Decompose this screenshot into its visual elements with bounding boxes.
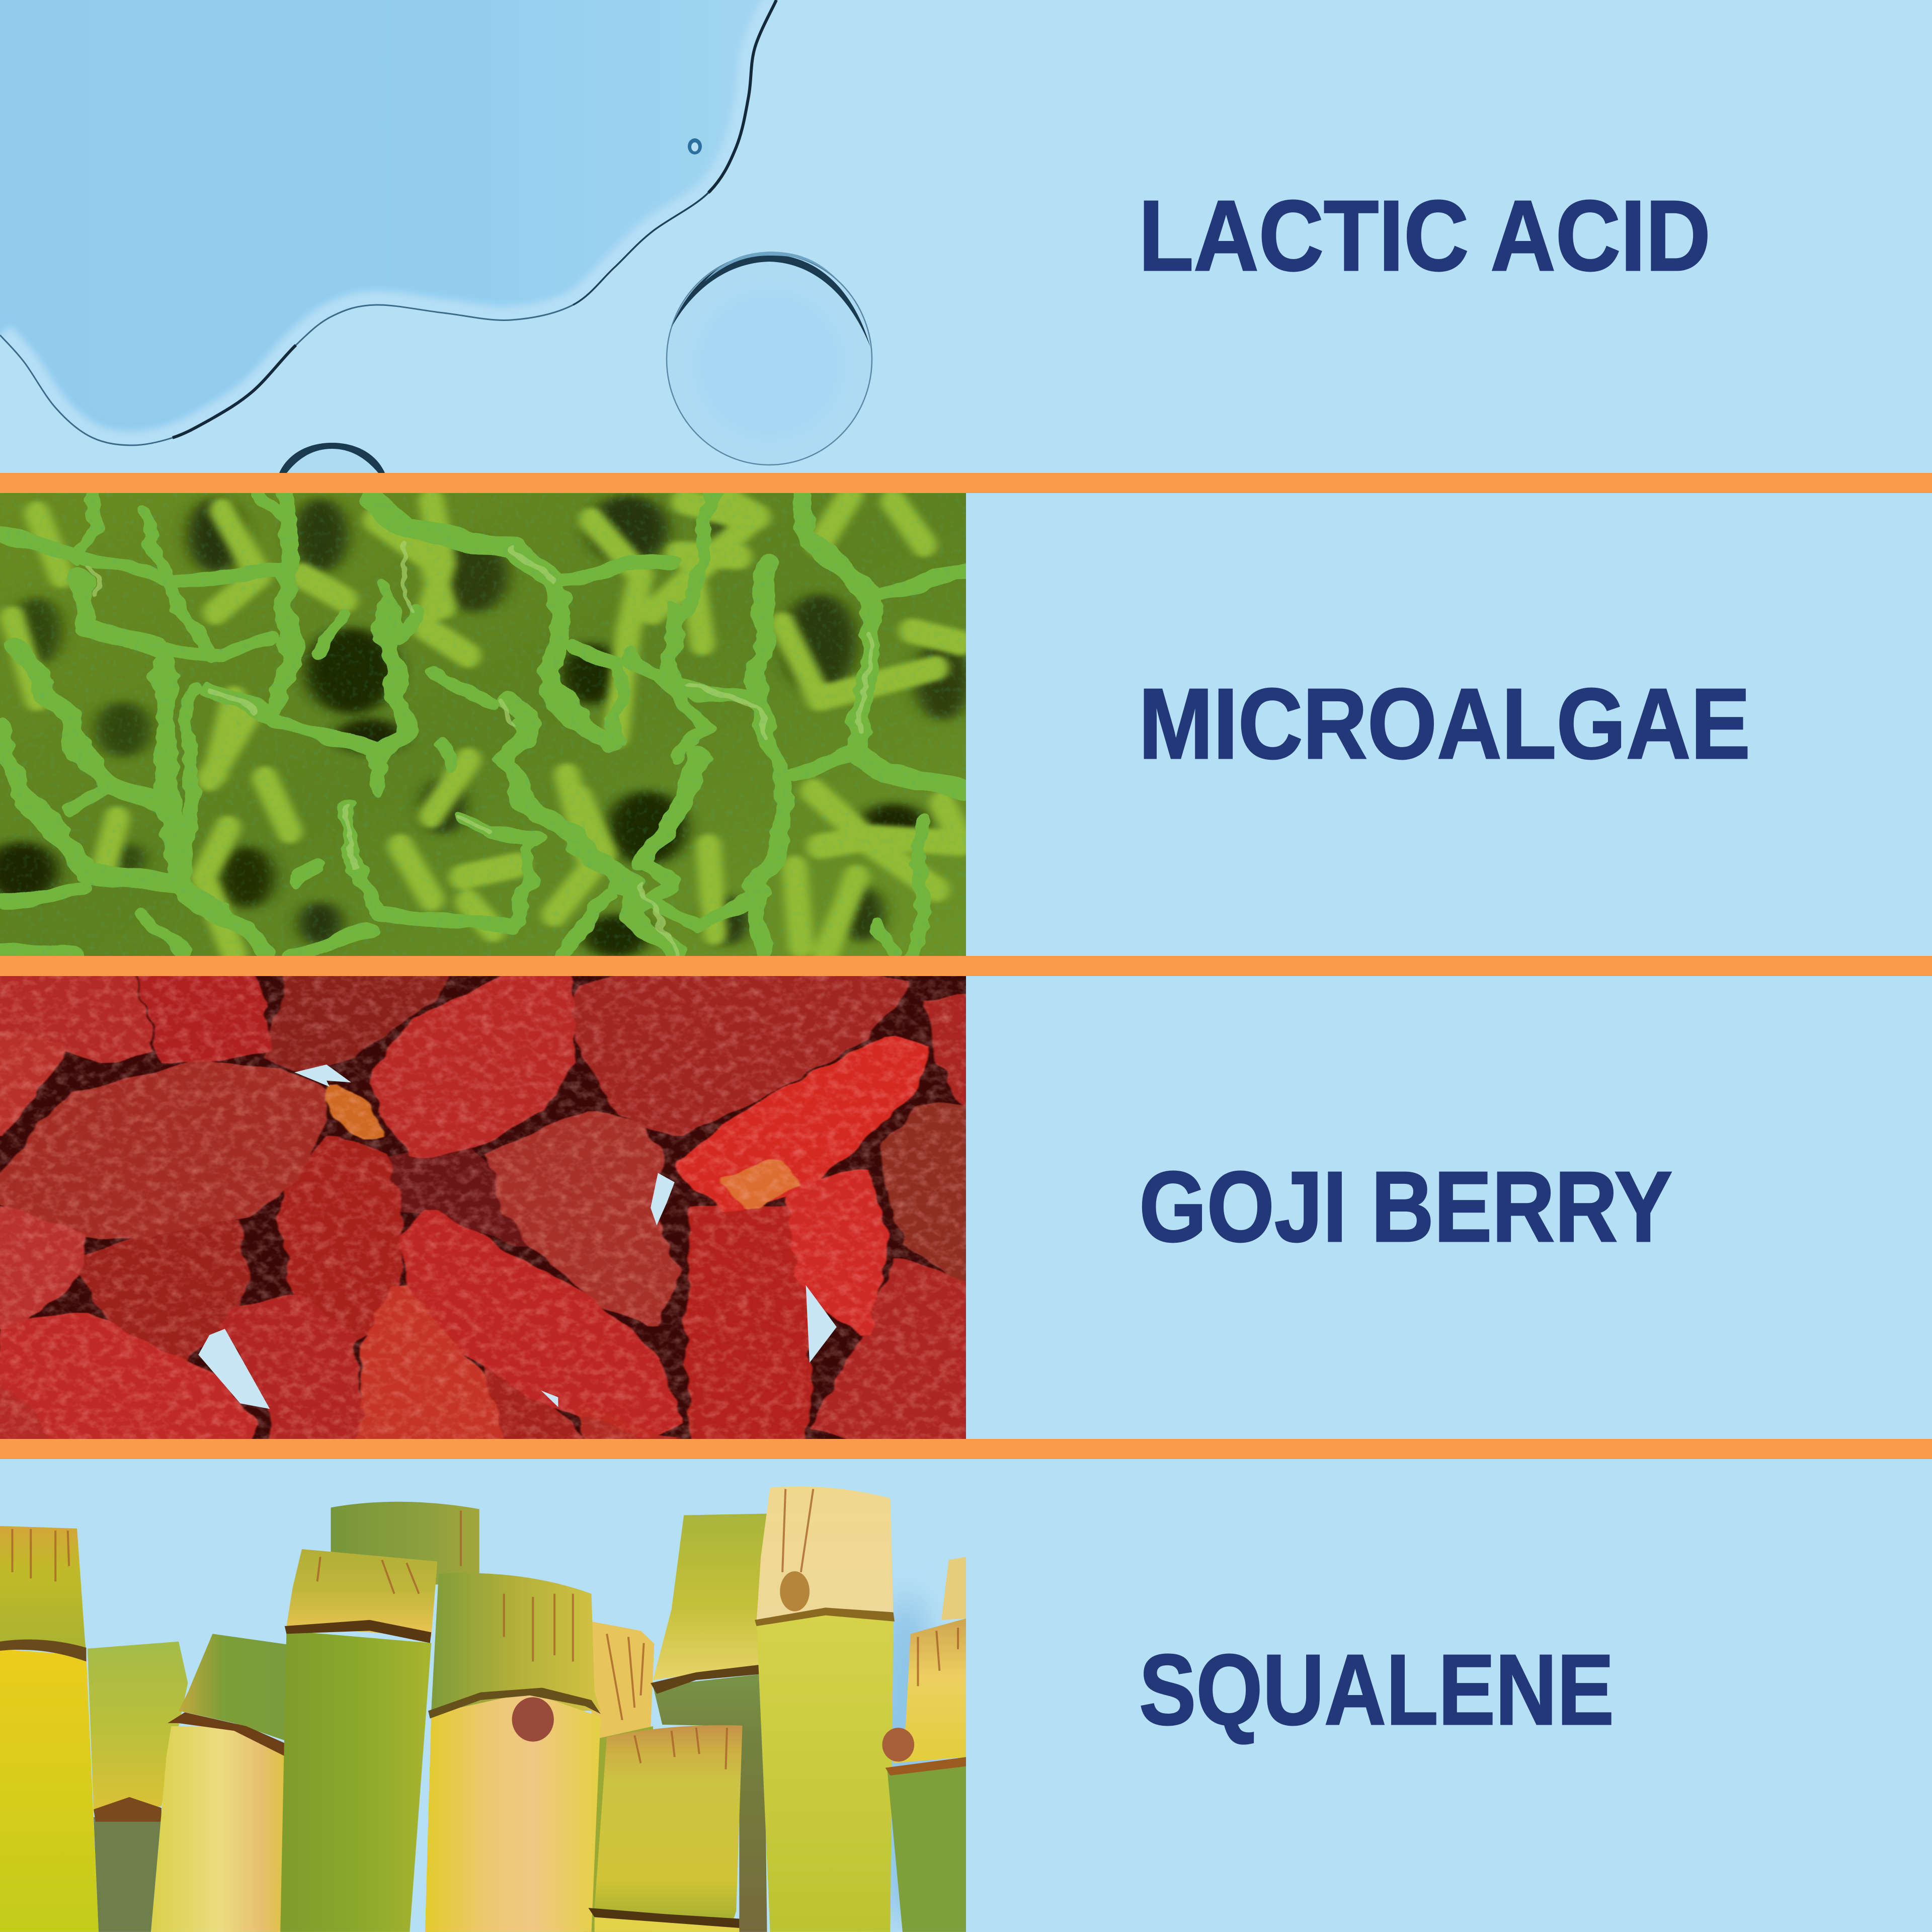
sugarcane stalks [0, 1486, 966, 1932]
panel: goji berry photo [0, 976, 966, 1439]
cane streaks [12, 1489, 958, 1769]
soft shadow on the backdrop [870, 1595, 941, 1927]
algae speckles [0, 493, 966, 956]
algae background [0, 493, 966, 956]
berry dark background [0, 976, 966, 1439]
algae sharp branches [0, 495, 966, 954]
algae out-of-focus shadows [0, 495, 971, 957]
panel: lactic acid photo [0, 0, 872, 473]
stalk: third from left [151, 1634, 288, 1932]
stalk: second from left [88, 1642, 188, 1932]
label: microalgae: MICROALGAE [1139, 668, 1750, 780]
panel: squalene sugarcane photo [0, 1486, 966, 1932]
stalk: right back [651, 1514, 767, 1932]
stalk: tallest cream [755, 1486, 895, 1932]
stalk: back centre green [331, 1502, 479, 1584]
large water droplet [667, 252, 872, 465]
label: lactic acid: LACTIC ACID [1139, 180, 1711, 292]
stalk: tall green [280, 1549, 437, 1932]
stalk: far left [0, 1526, 99, 1932]
tiny bubble [688, 138, 702, 154]
algae blurred branches [12, 495, 961, 954]
stalk: far right [882, 1557, 966, 1932]
label: goji berry: GOJI BERRY [1139, 1151, 1672, 1263]
goji berries [0, 976, 966, 1439]
berry wrinkle texture [0, 976, 966, 1439]
label: squalene: SQUALENE [1139, 1634, 1614, 1746]
liquid puddle [0, 0, 776, 445]
panel: microalgae photo [0, 493, 971, 957]
orange divider 3 [0, 1439, 1932, 1459]
orange divider 2 [0, 956, 1932, 976]
orange divider 1 [0, 473, 1932, 493]
stalk: centre with bud [425, 1573, 601, 1932]
stalk: front short [588, 1725, 743, 1932]
stalk: back orange [582, 1622, 654, 1932]
partial water droplet [279, 443, 385, 549]
gaps showing pale background [198, 1065, 837, 1409]
